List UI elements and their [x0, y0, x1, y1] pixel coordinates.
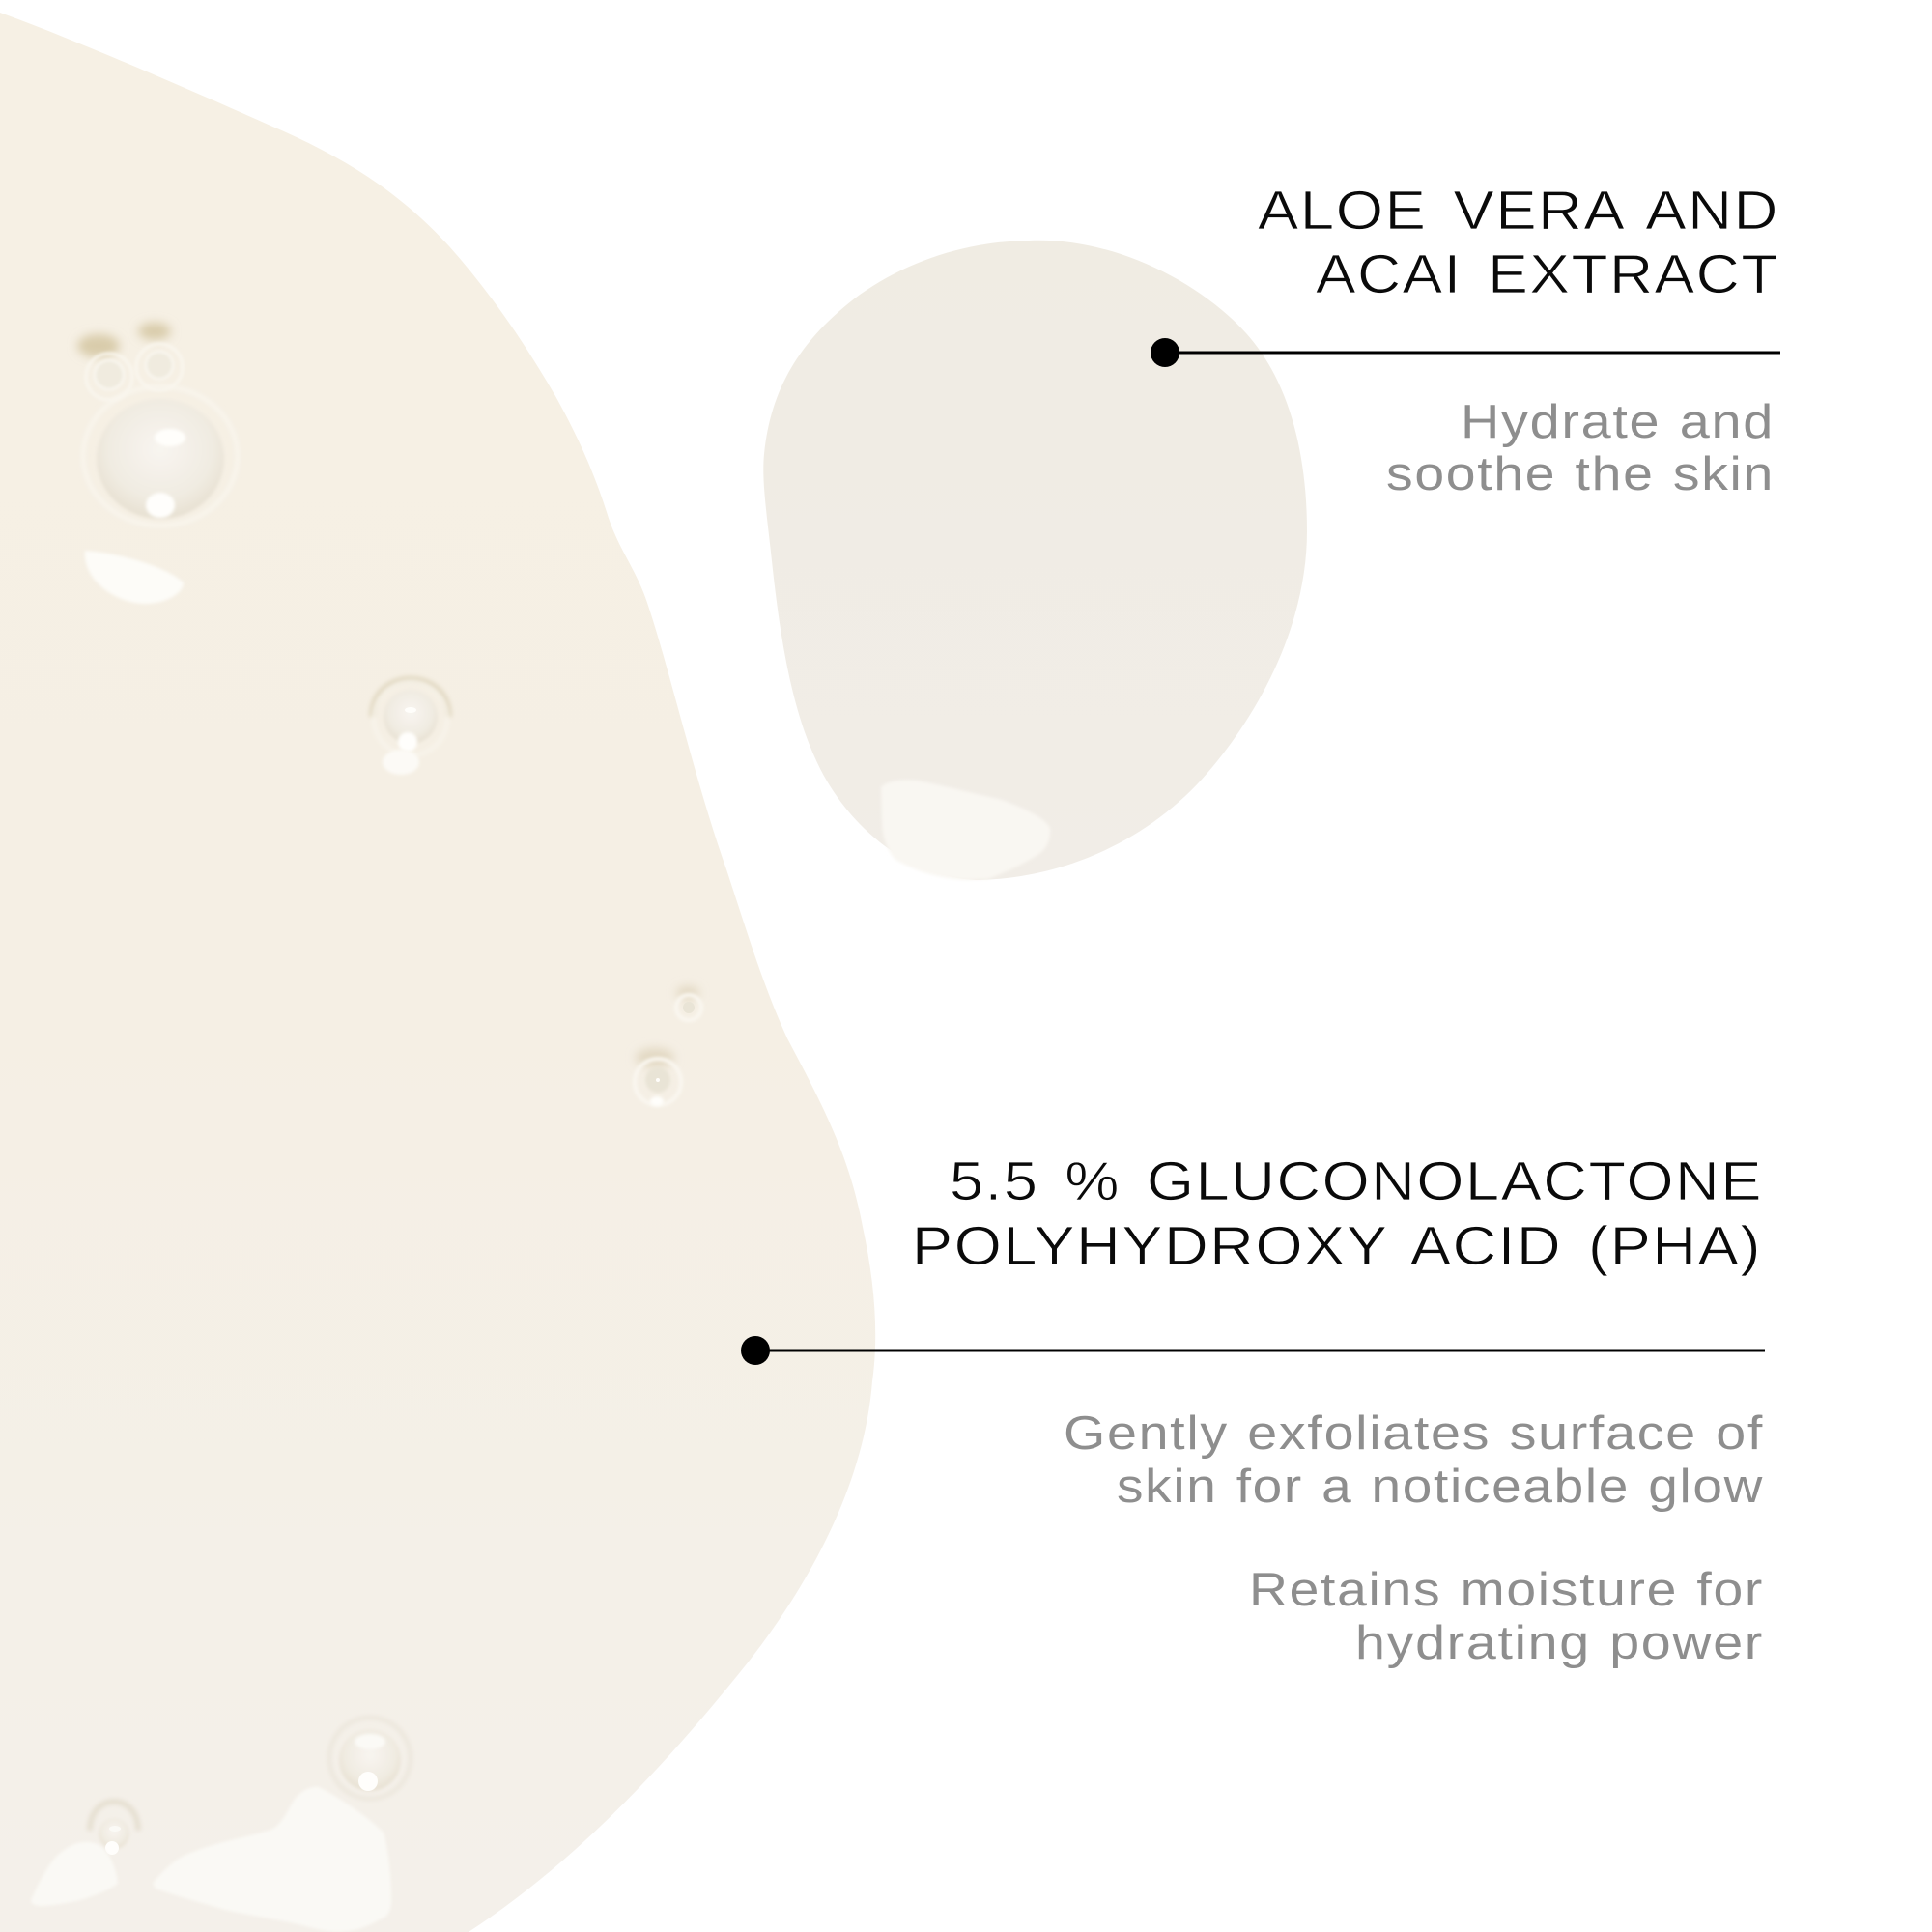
panel: large serum swatch: [0, 13, 875, 1932]
small bubble right upper: [676, 986, 701, 1020]
description: exfoliation: skin for a noticeable glow: [1117, 1461, 1764, 1513]
leader line with dot: [741, 1336, 1765, 1365]
bubble middle left: [372, 679, 449, 775]
white reflection: [881, 781, 1050, 880]
callout: gluconolactone PHA: [741, 1151, 1765, 1669]
callout: aloe vera and acai extract: [1151, 180, 1780, 500]
description: exfoliation: Gently exfoliates surface of: [1064, 1407, 1764, 1460]
heading: 5.5 % GLUCONOLACTONE: [950, 1151, 1763, 1212]
leader line with dot: [1151, 338, 1780, 367]
description: moisture: Retains moisture for: [1249, 1564, 1764, 1616]
bubble bottom: [329, 1718, 411, 1799]
bubble cluster top left: [77, 323, 238, 526]
small bubble right lower: [635, 1048, 681, 1106]
white reflection bottom left: [31, 1842, 118, 1906]
panel: small serum swatch: [763, 241, 1307, 880]
heading: ACAI EXTRACT: [1316, 243, 1779, 305]
description: Hydrate and: [1461, 396, 1775, 448]
swatch shape: [0, 13, 875, 1932]
heading: POLYHYDROXY ACID (PHA): [912, 1215, 1762, 1277]
swatch shape: [763, 241, 1307, 880]
bubble bottom left: [90, 1802, 138, 1855]
description: [1386, 396, 1775, 500]
white reflection crescent: [85, 551, 184, 604]
heading: [912, 1151, 1763, 1277]
heading: ALOE VERA AND: [1258, 180, 1779, 242]
description: moisture: hydrating power: [1355, 1617, 1764, 1669]
description: moisture: [1249, 1564, 1764, 1669]
white reflection bottom large: [154, 1787, 391, 1932]
heading: [1258, 180, 1779, 305]
description: exfoliation: [1064, 1407, 1764, 1513]
description: soothe the skin: [1386, 448, 1775, 500]
